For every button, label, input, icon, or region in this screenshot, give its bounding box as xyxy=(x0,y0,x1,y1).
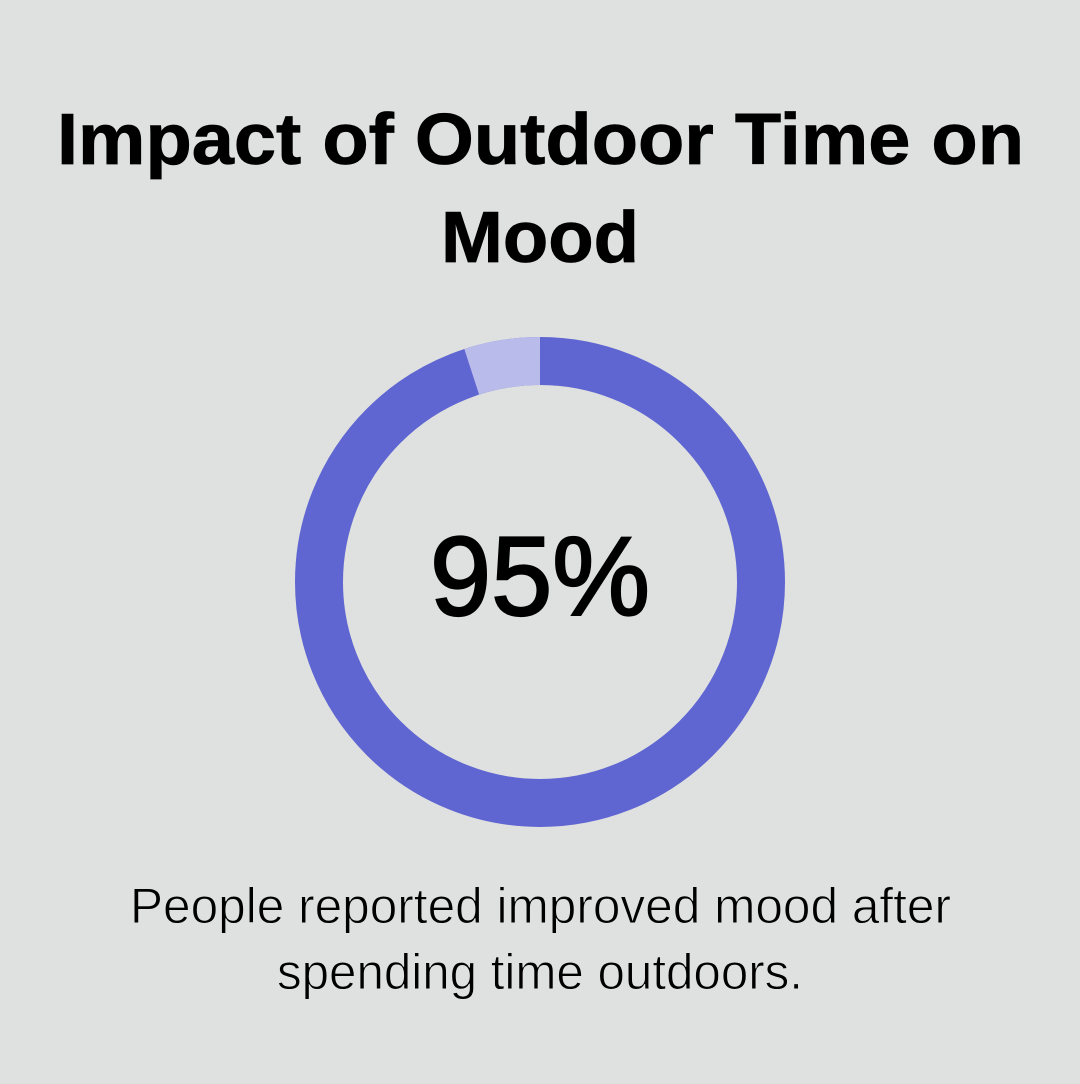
center value: 95%: 95% xyxy=(430,514,650,639)
title xyxy=(57,100,1024,278)
caption xyxy=(130,878,951,1000)
caption: spending time outdoors. xyxy=(277,944,803,1000)
caption: People reported improved mood after xyxy=(130,878,951,934)
donut chart: 95% xyxy=(319,361,761,803)
title: Impact of Outdoor Time on xyxy=(57,100,1024,180)
title: Mood xyxy=(441,198,639,278)
